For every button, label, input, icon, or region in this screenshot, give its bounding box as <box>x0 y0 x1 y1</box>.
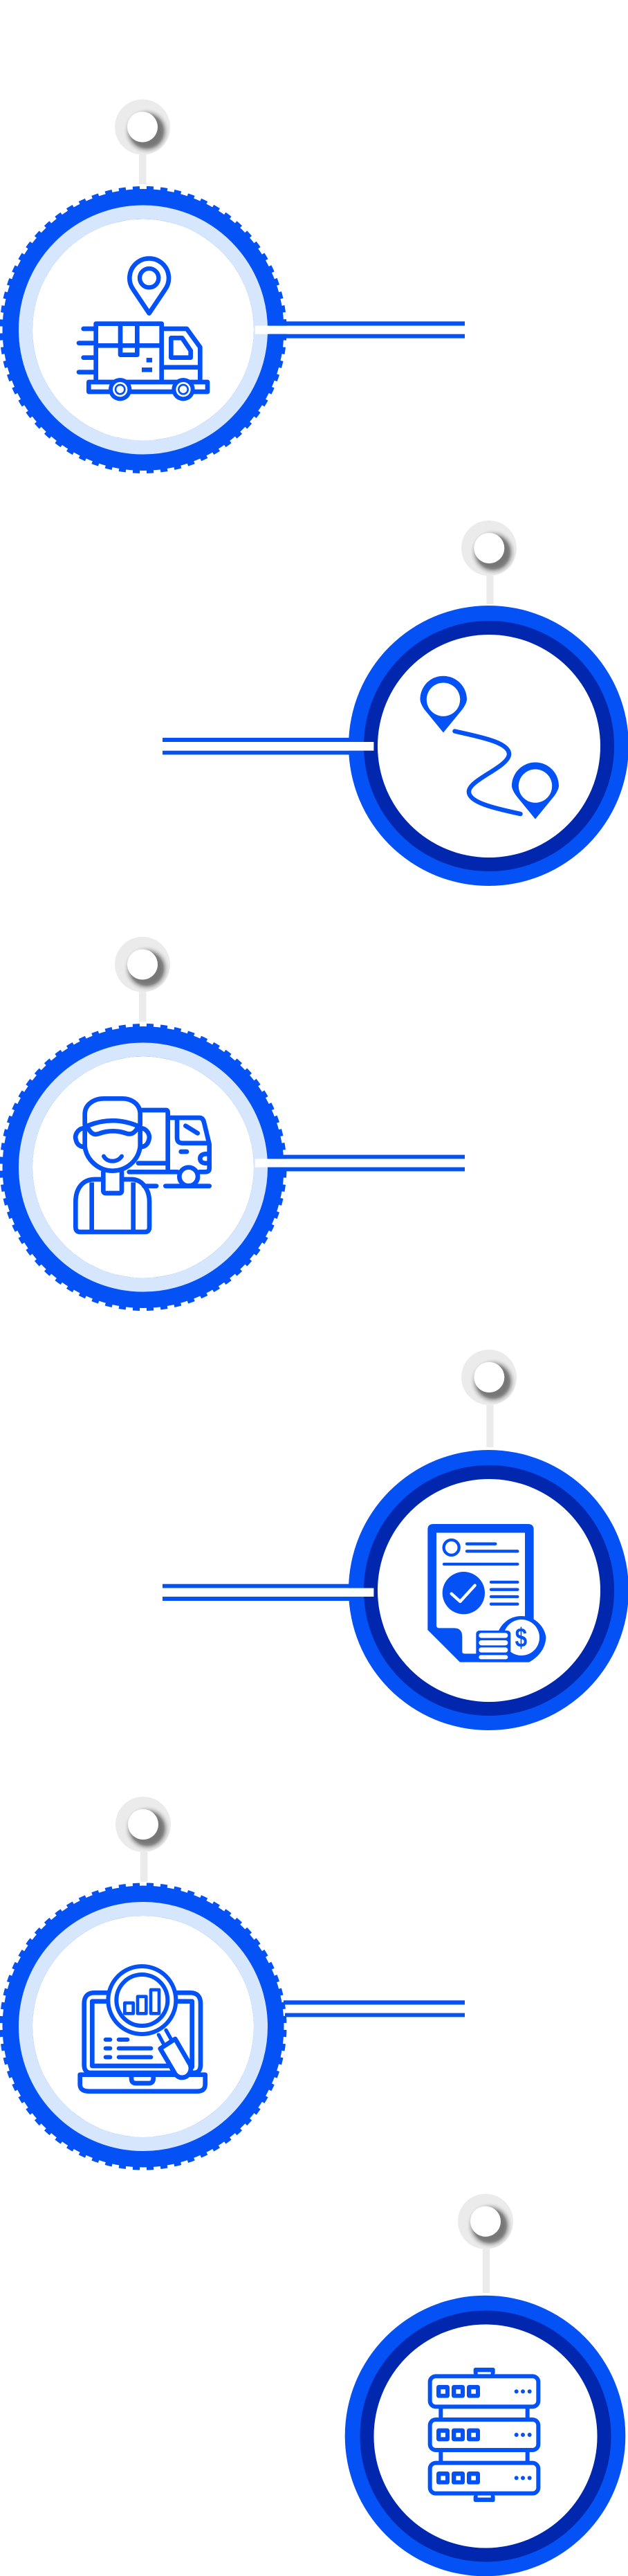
icon: invoice with check mark and coins: $ <box>515 1622 527 1653</box>
icon: driver in front of truck <box>75 1098 210 1232</box>
step 3: driver and truck <box>1 937 465 1309</box>
double ring 6 <box>345 2296 625 2576</box>
pin marker 2 <box>461 520 517 604</box>
connector lines 3 <box>255 1155 465 1171</box>
icon: truck with location pin <box>79 258 207 401</box>
pin marker 4 <box>461 1350 517 1447</box>
step 2: route between points <box>163 520 628 886</box>
step 4: invoice document <box>163 1350 628 1730</box>
connector lines 1 <box>255 321 465 338</box>
connector lines 5 <box>284 2000 465 2017</box>
icon: laptop with magnifier and bar chart <box>80 1966 205 2092</box>
double ring 4 <box>349 1450 628 1730</box>
icon: server stack <box>430 2368 538 2502</box>
toothed ring 3 <box>1 1026 285 1309</box>
step 1: delivery truck <box>1 100 465 472</box>
icon: route with two map pins <box>421 676 559 819</box>
toothed ring 5 <box>1 1885 285 2168</box>
pin marker 3 <box>115 937 170 1022</box>
toothed ring 1 <box>1 188 285 472</box>
pin marker 1 <box>115 100 170 184</box>
double ring 2 <box>349 606 628 886</box>
connector lines 2 <box>163 738 373 754</box>
icon: invoice with check mark and coins <box>427 1524 546 1662</box>
pin marker 5 <box>116 1797 171 1882</box>
pin marker 6 <box>458 2194 513 2293</box>
connector lines 4 <box>163 1584 373 1601</box>
step 6: server rack <box>345 2194 625 2576</box>
step 5: data analysis laptop <box>1 1797 465 2168</box>
